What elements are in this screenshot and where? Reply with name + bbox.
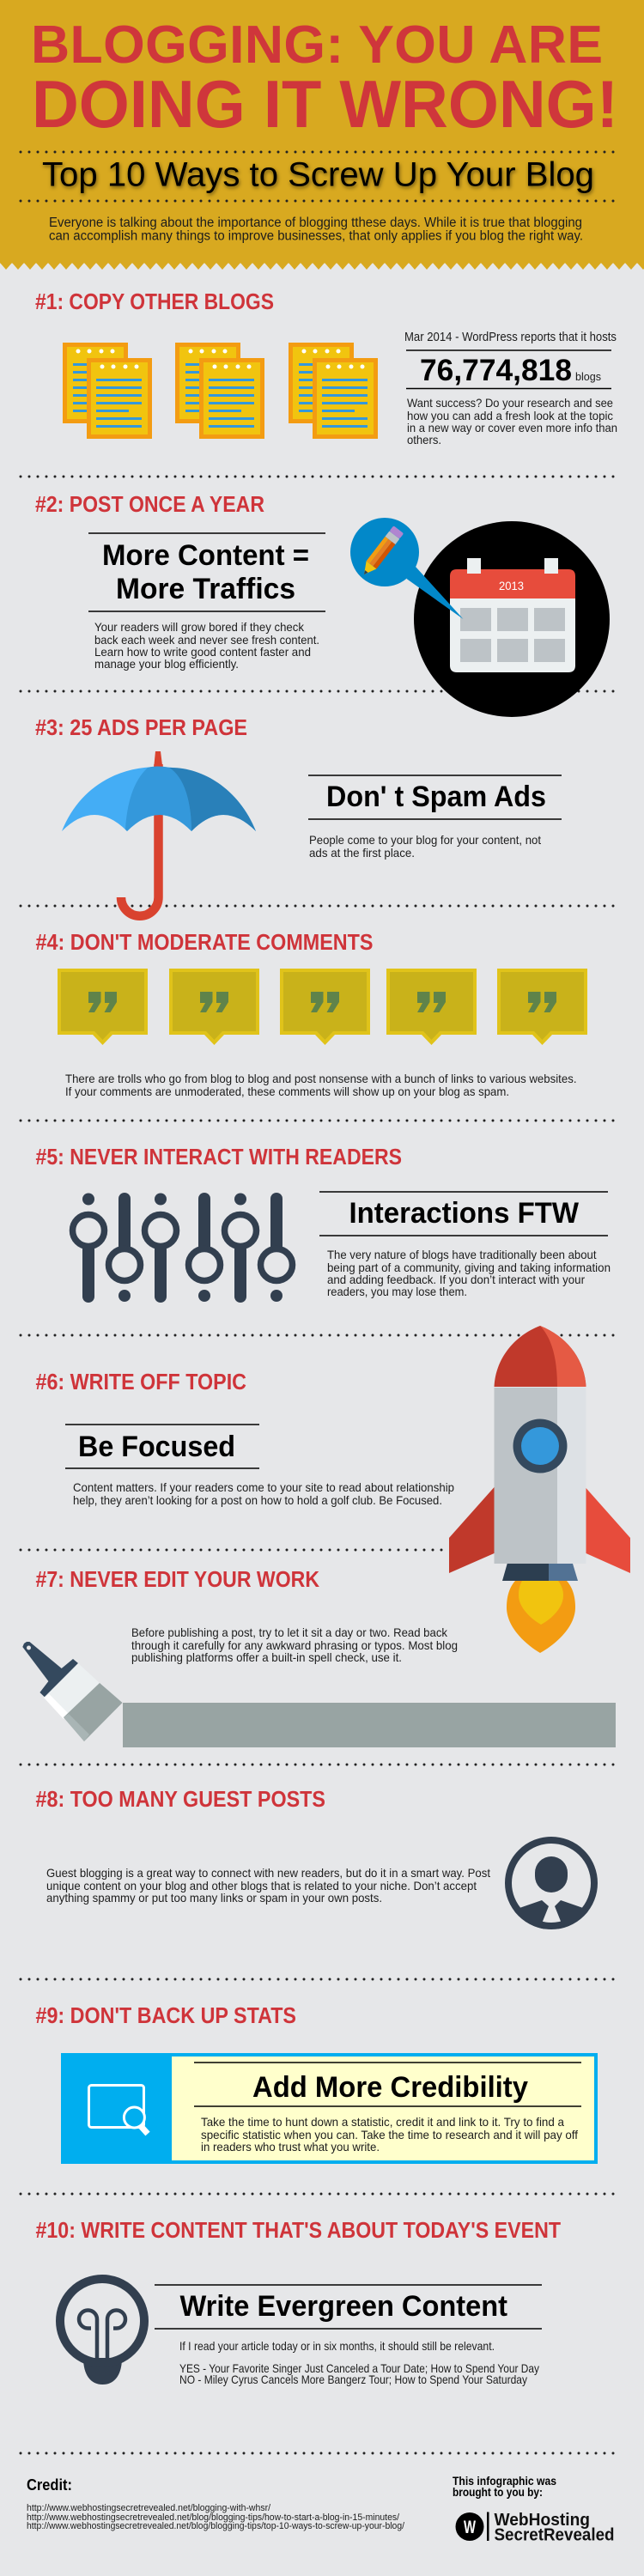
heading 6: #6: WRITE OFF TOPIC (36, 1370, 246, 1394)
paint stroke (123, 1703, 616, 1747)
body text 6: help, they aren’t looking for a post on how to hold a golf club. Be Focused. (73, 1493, 442, 1507)
body text 9: in readers who trust what you write. (201, 2140, 380, 2154)
panel: tip 8 (36, 1788, 596, 1932)
panel: tip 10 (36, 2219, 561, 2386)
body text 5: readers, you may lose them. (327, 1285, 467, 1298)
icon: paint brush (22, 1642, 122, 1741)
body text 2: Learn how to write good content faster and (94, 645, 311, 659)
source links: http://www.webhostingsecretrevealed.net/blog/blogging-tips/top-10-ways-to-screw-up-your-blog/ (27, 2521, 405, 2531)
sponsor text: This infographic was (453, 2474, 556, 2488)
intro text: Everyone is talking about the importance of blogging tthese days. While it is true that blogging (49, 216, 582, 230)
body text 7: publishing platforms offer a built-in spell check, use it. (131, 1650, 402, 1664)
stat number: 76,774,818 (420, 354, 572, 387)
icon: calendar (414, 521, 610, 717)
body text 4: There are trolls who go from blog to blog and post nonsense with a bunch of links to various websites. (65, 1072, 577, 1085)
icon: rocket (449, 1326, 630, 1653)
icon: search (89, 2085, 148, 2134)
panel: tip 7 (22, 1568, 616, 1747)
body text 10: NO - Miley Cyrus Cancels More Bangerz Tour; How to Spend Your Saturday (179, 2372, 527, 2386)
panel: tip 9 (36, 2004, 598, 2164)
callout title 6: Be Focused (78, 1431, 235, 1463)
body text 8 (46, 1866, 490, 1905)
callout title 5: Interactions FTW (349, 1197, 580, 1230)
sponsor text: brought to you by: (453, 2485, 543, 2499)
body text 1: others. (407, 433, 441, 447)
logo (455, 2511, 615, 2545)
heading 8: #8: TOO MANY GUEST POSTS (36, 1788, 325, 1812)
icon: pencil bubble (350, 518, 464, 619)
title line 2: DOING IT WRONG! (32, 66, 618, 142)
icon: umbrella (62, 751, 256, 916)
body text 6 (73, 1480, 454, 1507)
intro text: can accomplish many things to improve businesses, that only applies if you blog the right way. (49, 228, 583, 244)
callout title 2 (102, 539, 309, 605)
body text 1: in a new way or cover even more info than (407, 421, 617, 434)
body text 5 (327, 1248, 611, 1298)
body text 10: If I read your article today or in six months, it should still be relevant. (179, 2339, 495, 2353)
body text 9: Take the time to hunt down a statistic, credit it and link to it. Try to find a (201, 2115, 564, 2129)
body text 10: YES - Your Favorite Singer Just Canceled a Tour Date; How to Spend Your Day (179, 2361, 539, 2375)
body text 7: through it carefully for any awkward phrasing or typos. Most blog (131, 1638, 458, 1652)
callout title 2: More Traffics (116, 573, 295, 605)
callout box (61, 2053, 598, 2164)
stat unit: blogs (575, 370, 601, 383)
body text 1: Want success? Do your research and see (407, 396, 613, 410)
footer: credits (27, 2476, 405, 2531)
header (0, 0, 644, 270)
body text 2 (94, 620, 319, 671)
body text 9: specific statistic when you can. Take the time to research and it will pay off (201, 2128, 578, 2142)
logo: W (464, 2518, 476, 2537)
heading 7: #7: NEVER EDIT YOUR WORK (36, 1568, 320, 1592)
source links (27, 2503, 405, 2531)
callout title 9: Add More Credibility (252, 2071, 528, 2104)
body text 2: Your readers will grow bored if they check (94, 620, 305, 634)
intro text (49, 216, 583, 244)
body text 2: manage your blog efficiently. (94, 657, 239, 671)
body text 5: The very nature of blogs have traditionally been about (327, 1248, 597, 1261)
icon: sliders (72, 1193, 292, 1303)
sponsor text (453, 2474, 556, 2499)
icon: calendar: 2013 (499, 579, 524, 592)
logo: WebHosting (495, 2511, 590, 2530)
icon: documents (65, 345, 376, 436)
heading 10: #10: WRITE CONTENT THAT'S ABOUT TODAY'S EVENT (36, 2219, 561, 2243)
body text 8: anything spammy or put too many links or spam in your own posts. (46, 1891, 382, 1905)
heading 3: #3: 25 ADS PER PAGE (35, 716, 247, 740)
panel: tip 4 (36, 931, 587, 1098)
callout title 10: Write Evergreen Content (180, 2290, 507, 2323)
body text 5: being part of a community, giving and taking information (327, 1261, 611, 1274)
panel: tip 6 (36, 1326, 630, 1653)
callout title 2: More Content = (102, 539, 309, 572)
footer: sponsor (453, 2474, 615, 2545)
body text 10 (179, 2339, 539, 2386)
body text 3 (309, 833, 541, 860)
source links: http://www.webhostingsecretrevealed.net/blogging-with-whsr/ (27, 2503, 271, 2513)
body text 8: unique content on your blog and other blogs that is related to your niche. Don’t accept (46, 1879, 477, 1893)
panel: tip 1 (35, 290, 617, 447)
source links: http://www.webhostingsecretrevealed.net/blog/blogging-tips/how-to-start-a-blog-in-15-minutes/ (27, 2512, 400, 2523)
body text 7: Before publishing a post, try to let it sit a day or two. Read back (131, 1625, 448, 1639)
body text 9 (201, 2115, 578, 2154)
heading 4: #4: DON'T MODERATE COMMENTS (36, 931, 373, 955)
body text 4 (65, 1072, 577, 1098)
icon: comment bubbles (58, 969, 587, 1045)
body text 4: If your comments are unmoderated, these comments will show up on your blog as spam. (65, 1084, 509, 1098)
body text 2: back each week and never see fresh content. (94, 633, 319, 647)
stat intro: Mar 2014 - WordPress reports that it hosts (404, 330, 617, 344)
callout title 3: Don' t Spam Ads (326, 781, 546, 813)
logo: SecretRevealed (495, 2526, 615, 2545)
title line 1: BLOGGING: YOU ARE (31, 15, 603, 75)
body text 1 (407, 396, 617, 447)
heading 5: #5: NEVER INTERACT WITH READERS (36, 1145, 402, 1170)
body text 3: ads at the first place. (309, 846, 415, 860)
heading 9: #9: DON'T BACK UP STATS (36, 2004, 296, 2028)
credit heading: Credit: (27, 2476, 72, 2494)
panel: tip 2 (35, 493, 610, 717)
icon: person (507, 1840, 596, 1932)
body text 8: Guest blogging is a great way to connect with new readers, but do it in a smart way. Post (46, 1866, 490, 1880)
icon: light bulb (60, 2279, 144, 2385)
panel: tip 3 (35, 716, 562, 916)
heading 1: #1: COPY OTHER BLOGS (35, 290, 274, 314)
body text 1: how you can add a fresh look at the topic (407, 409, 613, 422)
body text 6: Content matters. If your readers come to your site to read about relationship (73, 1480, 454, 1494)
body text 3: People come to your blog for your content, not (309, 833, 541, 847)
heading 2: #2: POST ONCE A YEAR (35, 493, 264, 517)
body text 7 (131, 1625, 458, 1664)
panel: tip 5 (36, 1145, 611, 1303)
subtitle: Top 10 Ways to Screw Up Your Blog (42, 156, 594, 194)
body text 5: and adding feedback. If you don’t interact with your (327, 1273, 585, 1286)
